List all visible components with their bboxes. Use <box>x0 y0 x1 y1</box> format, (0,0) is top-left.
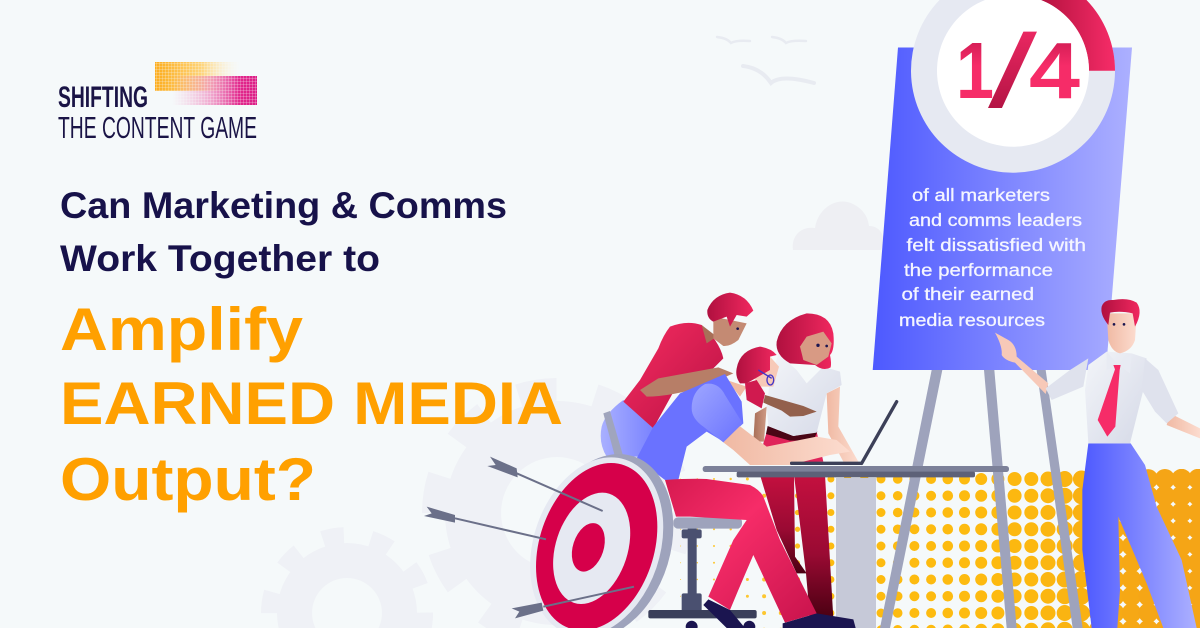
seated man beard <box>745 380 765 408</box>
presenter tie <box>1098 365 1121 437</box>
stat: 1/4: / <box>988 14 1037 130</box>
text block: board caption <box>899 185 1086 330</box>
standing man head <box>713 317 747 346</box>
text block: board caption: media resources <box>899 310 1045 330</box>
heading: question <box>60 185 507 279</box>
stat: 1/4: 4 <box>1029 26 1081 115</box>
logo halftone bands <box>155 62 257 105</box>
table leg <box>836 478 876 628</box>
seated man trousers <box>665 479 817 623</box>
target front rim <box>530 457 663 628</box>
icon: cloud <box>793 201 883 250</box>
icon: target with arrows <box>424 454 673 628</box>
woman eyes <box>816 344 828 347</box>
logo text: the content game: THE CONTENT GAME <box>58 110 257 145</box>
heading: question: Can Marketing & Comms <box>60 185 507 226</box>
heading: highlight <box>60 296 563 513</box>
standing man hair <box>707 293 753 327</box>
figure: presenter <box>995 299 1200 628</box>
laptop <box>790 402 897 465</box>
arrow 3 <box>512 587 634 618</box>
text block: board caption: the performance <box>904 260 1053 280</box>
table top <box>703 466 1009 477</box>
standing man jeans <box>601 400 653 457</box>
figures: team at table <box>601 293 1009 628</box>
seated man face <box>753 357 779 387</box>
icon: birds <box>717 37 814 83</box>
text block: board caption: of their earned <box>902 284 1034 304</box>
woman right leg <box>794 475 833 618</box>
presenter shirt <box>1085 352 1147 443</box>
standing man forearm <box>640 367 733 397</box>
heading: highlight: Amplify <box>60 296 304 363</box>
stat: 1/4 <box>956 14 1081 130</box>
text block: board caption: of all marketers <box>912 185 1050 205</box>
woman left leg <box>760 475 807 573</box>
pointing arm <box>763 395 817 417</box>
seated man shirt <box>637 374 743 480</box>
panel: easel board <box>873 48 1132 370</box>
target middle ring <box>540 483 644 614</box>
target outer ring <box>536 463 657 628</box>
logo <box>58 62 257 145</box>
chart: one-quarter donut <box>911 0 1115 173</box>
standing man upper arm <box>640 348 673 395</box>
presenter pointing arm <box>995 333 1048 394</box>
presenter sleeves <box>1046 358 1178 423</box>
seated man sleeve <box>692 384 743 442</box>
logo text: shifting: SHIFTING <box>58 81 148 114</box>
woman waist <box>760 427 823 465</box>
woman hair <box>776 313 834 369</box>
seated man glasses <box>758 370 774 385</box>
chair <box>603 411 757 628</box>
woman belt <box>766 426 817 441</box>
standing man neck <box>702 325 717 343</box>
heading: question: Work Together to <box>60 238 380 279</box>
presenter trousers <box>1082 443 1197 628</box>
arrow 1 <box>487 457 603 511</box>
woman near arm <box>753 407 767 442</box>
text block: board caption: and comms leaders <box>909 210 1082 230</box>
easel legs <box>880 370 1083 628</box>
presenter head <box>1107 313 1137 353</box>
target back rim <box>535 454 673 628</box>
standing man eye <box>736 327 739 330</box>
seated man shoes <box>703 599 856 628</box>
text block: board caption: felt dissatisfied with <box>906 235 1086 255</box>
woman face <box>800 332 832 365</box>
heading: highlight: EARNED MEDIA <box>60 370 563 437</box>
target bullseye <box>566 519 611 576</box>
halftone dot field <box>678 469 1200 628</box>
standing man shirt <box>623 323 723 428</box>
heading: highlight: Output? <box>60 446 316 513</box>
presenter collar <box>1107 352 1132 373</box>
woman shirt <box>767 354 842 436</box>
icon: large background gear <box>420 378 695 628</box>
icon: small background gear <box>258 524 436 628</box>
presenter hair <box>1101 299 1140 327</box>
presenter eyes <box>1113 323 1125 326</box>
presenter other arm <box>1167 413 1200 438</box>
stat: 1/4: 1 <box>956 26 994 115</box>
arrow 2 <box>424 507 546 539</box>
seated man arm <box>723 425 850 465</box>
woman far arm <box>827 387 858 462</box>
seated man neck <box>727 380 747 397</box>
seated man hair <box>736 347 777 383</box>
